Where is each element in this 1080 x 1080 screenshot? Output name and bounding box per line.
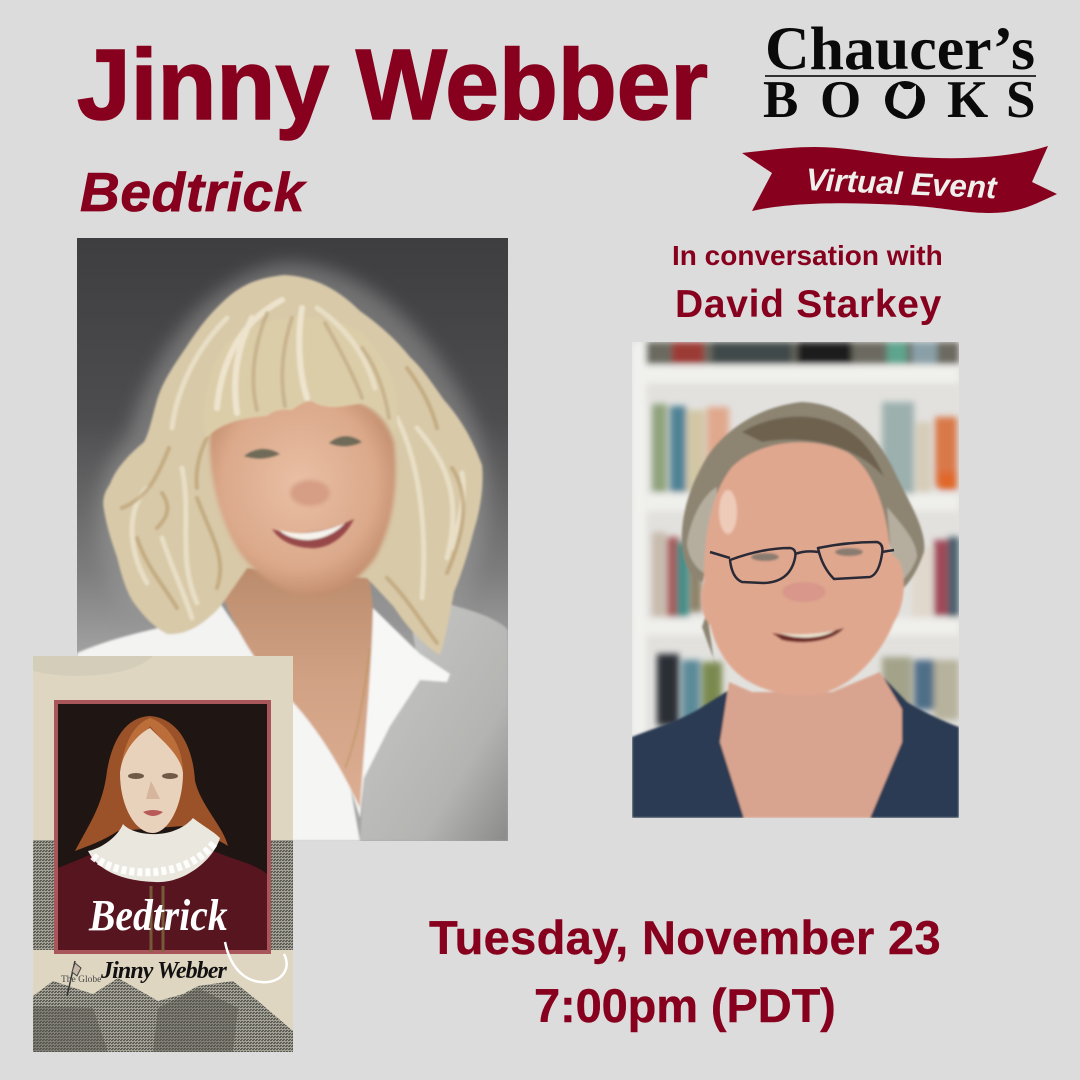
face	[210, 392, 396, 596]
cover caption: The Globe	[61, 975, 101, 985]
cover author: Jinny Webber	[101, 958, 226, 984]
banner: Virtual Event: Virtual Event	[805, 162, 997, 205]
neck	[220, 558, 373, 808]
face	[120, 728, 183, 833]
logo: Chaucer's Books: Chaucer’s	[765, 14, 1035, 82]
blurred bookshelves	[632, 342, 959, 742]
subtitle: book name: Bedtrick	[80, 161, 305, 223]
logo: Chaucer's Books: S	[1006, 71, 1035, 129]
logo: Chaucer's Books: B	[763, 71, 798, 129]
white shirt	[77, 603, 317, 841]
photo: Jinny Webber portrait	[77, 238, 508, 841]
guest name: David Starkey	[675, 283, 942, 326]
logo: Chaucer's Books: O	[820, 71, 861, 129]
title swash	[225, 942, 287, 982]
ruff collar	[88, 818, 220, 882]
flag pole	[67, 961, 75, 996]
velvet coat	[58, 851, 267, 950]
hair mass	[103, 275, 483, 655]
engraved city	[33, 840, 54, 950]
icon: cat in circle	[885, 81, 925, 119]
neck	[720, 672, 902, 818]
title: Jinny Webber	[77, 29, 708, 141]
eyes	[751, 553, 779, 561]
cover title: Bedtrick	[89, 891, 228, 940]
book cover: Bedtrick	[33, 656, 293, 1052]
shirt	[632, 674, 959, 818]
bangs	[204, 300, 397, 438]
red hair	[75, 716, 228, 851]
face	[701, 442, 904, 695]
logo: Chaucer's Books: K	[947, 71, 988, 129]
smile	[272, 519, 354, 548]
smile	[772, 628, 844, 642]
hair strands	[122, 318, 463, 643]
portrait frame	[56, 702, 269, 952]
halo behind hair	[97, 263, 489, 618]
event date: Tuesday, November 23	[429, 911, 941, 964]
banner: Virtual Event	[742, 146, 1057, 213]
hair	[682, 402, 924, 592]
photo: David Starkey portrait	[632, 342, 959, 818]
logo: Chaucer's Books	[763, 14, 1036, 129]
label: in conversation with: In conversation with	[672, 240, 943, 271]
event time: 7:00pm (PDT)	[534, 979, 836, 1032]
eyes	[244, 449, 280, 459]
glasses	[710, 542, 894, 583]
grey sleeve	[360, 598, 508, 841]
